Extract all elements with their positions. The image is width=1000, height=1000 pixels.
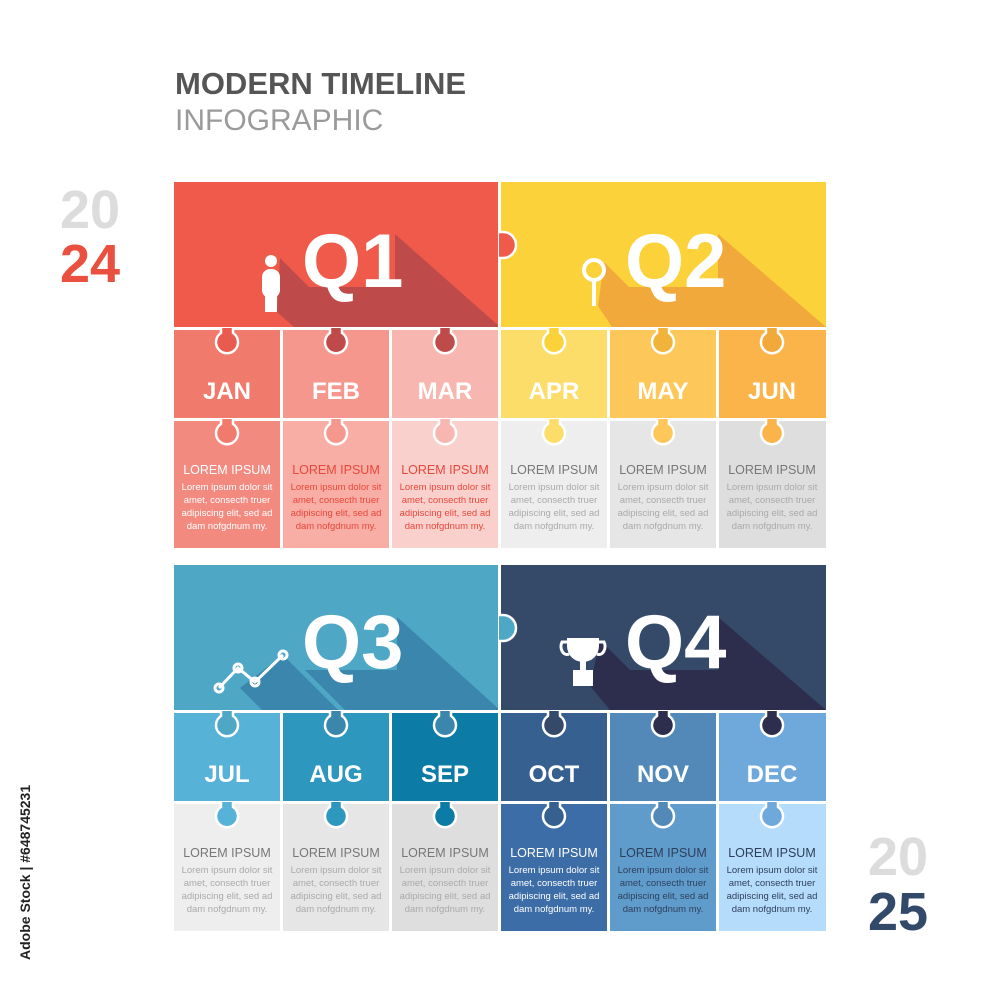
text row: top: adipiscing elit, sed ad	[509, 508, 599, 519]
text row: bottom: Lorem ipsum dolor sit	[182, 865, 273, 876]
month row: bottom: DEC	[747, 761, 797, 788]
panel: Q4: Q4	[625, 600, 726, 685]
text row: bottom	[174, 802, 826, 931]
panel: Q3	[174, 565, 500, 710]
panel: Q2: Q2	[625, 219, 726, 304]
icon: magnifier	[584, 260, 604, 306]
panel: Q4	[499, 565, 826, 710]
title: MODERN TIMELINE	[175, 66, 466, 101]
text row: top: dam nofgdnum my.	[514, 521, 594, 532]
text row: bottom: Lorem ipsum dolor sit	[291, 865, 382, 876]
text row: top: amet, consecth truer	[511, 495, 597, 506]
text row: bottom: adipiscing elit, sed ad	[618, 891, 708, 902]
text row: top	[174, 419, 826, 548]
text row: top: adipiscing elit, sed ad	[727, 508, 817, 519]
text row: bottom: adipiscing elit, sed ad	[182, 891, 272, 902]
year 2024: 20	[60, 180, 120, 240]
text row: top: LOREM IPSUM	[619, 463, 707, 477]
panel: Q3: Q3	[302, 600, 403, 685]
month row: bottom	[174, 711, 826, 801]
text row: top: adipiscing elit, sed ad	[400, 508, 490, 519]
text row: top: LOREM IPSUM	[401, 463, 489, 477]
month row: top: JAN	[203, 378, 251, 405]
text row: bottom: LOREM IPSUM	[292, 846, 380, 860]
text row: top: dam nofgdnum my.	[732, 521, 812, 532]
stock id: Adobe Stock | #648745231	[17, 785, 33, 960]
text row: top: amet, consecth truer	[402, 495, 488, 506]
text row: top: dam nofgdnum my.	[623, 521, 703, 532]
year 2025: 20	[868, 827, 928, 887]
year 2025: 25	[868, 882, 928, 942]
panel: Q1	[174, 182, 500, 327]
text row: bottom: dam nofgdnum my.	[296, 904, 376, 915]
panel: Q1: Q1	[302, 219, 403, 304]
text row: bottom: adipiscing elit, sed ad	[400, 891, 490, 902]
text row: top: adipiscing elit, sed ad	[291, 508, 381, 519]
icon: trophy	[561, 638, 605, 686]
text row: top: LOREM IPSUM	[292, 463, 380, 477]
panel: Q2	[499, 182, 826, 327]
text row: top: LOREM IPSUM	[510, 463, 598, 477]
text row: bottom: amet, consecth truer	[293, 878, 379, 889]
text row: top: amet, consecth truer	[620, 495, 706, 506]
text row: top: dam nofgdnum my.	[296, 521, 376, 532]
text row: bottom: dam nofgdnum my.	[187, 904, 267, 915]
month row: bottom: AUG	[309, 761, 363, 788]
text row: top: adipiscing elit, sed ad	[618, 508, 708, 519]
month row: bottom: SEP	[421, 761, 469, 788]
text row: bottom: LOREM IPSUM	[401, 846, 489, 860]
title	[175, 66, 466, 137]
text row: bottom: LOREM IPSUM	[728, 846, 816, 860]
text row: bottom: amet, consecth truer	[729, 878, 815, 889]
text row: bottom: adipiscing elit, sed ad	[727, 891, 817, 902]
icon: chart	[215, 651, 287, 692]
text row: top: amet, consecth truer	[184, 495, 270, 506]
text row: top: adipiscing elit, sed ad	[182, 508, 272, 519]
text row: top: dam nofgdnum my.	[405, 521, 485, 532]
text row: bottom: dam nofgdnum my.	[514, 904, 594, 915]
text row: top: Lorem ipsum dolor sit	[291, 482, 382, 493]
text row: top: LOREM IPSUM	[183, 463, 271, 477]
text row: bottom: amet, consecth truer	[184, 878, 270, 889]
text row: bottom: adipiscing elit, sed ad	[509, 891, 599, 902]
year 2024: 24	[60, 234, 120, 294]
text row: bottom: Lorem ipsum dolor sit	[618, 865, 709, 876]
text row: bottom: Lorem ipsum dolor sit	[509, 865, 600, 876]
month row: bottom: JUL	[204, 761, 250, 788]
text row: top: Lorem ipsum dolor sit	[509, 482, 600, 493]
text row: top: amet, consecth truer	[729, 495, 815, 506]
month row: top	[174, 328, 826, 418]
text row: bottom: LOREM IPSUM	[183, 846, 271, 860]
month row: top: MAY	[637, 378, 689, 405]
text row: bottom: LOREM IPSUM	[510, 846, 598, 860]
text row: bottom: amet, consecth truer	[511, 878, 597, 889]
text row: top: Lorem ipsum dolor sit	[727, 482, 818, 493]
year 2024	[60, 180, 120, 294]
text row: bottom: amet, consecth truer	[402, 878, 488, 889]
month row: bottom: NOV	[637, 761, 689, 788]
month row: top: JUN	[748, 378, 796, 405]
text row: top: Lorem ipsum dolor sit	[618, 482, 709, 493]
text row: top: LOREM IPSUM	[728, 463, 816, 477]
text row: bottom: adipiscing elit, sed ad	[291, 891, 381, 902]
text row: top: Lorem ipsum dolor sit	[182, 482, 273, 493]
text row: bottom: LOREM IPSUM	[619, 846, 707, 860]
text row: bottom: Lorem ipsum dolor sit	[400, 865, 491, 876]
text row: bottom: Lorem ipsum dolor sit	[727, 865, 818, 876]
month row: bottom: OCT	[529, 761, 580, 788]
text row: bottom: amet, consecth truer	[620, 878, 706, 889]
text row: top: dam nofgdnum my.	[187, 521, 267, 532]
month row: top: APR	[529, 378, 579, 405]
month row: top: FEB	[312, 378, 360, 405]
text row: bottom: dam nofgdnum my.	[732, 904, 812, 915]
year 2025	[868, 827, 928, 942]
month row: top: MAR	[418, 378, 472, 405]
text row: top: Lorem ipsum dolor sit	[400, 482, 491, 493]
text row: bottom: dam nofgdnum my.	[405, 904, 485, 915]
title: INFOGRAPHIC	[175, 104, 383, 137]
text row: top: amet, consecth truer	[293, 495, 379, 506]
text row: bottom: dam nofgdnum my.	[623, 904, 703, 915]
icon: person	[262, 255, 280, 312]
